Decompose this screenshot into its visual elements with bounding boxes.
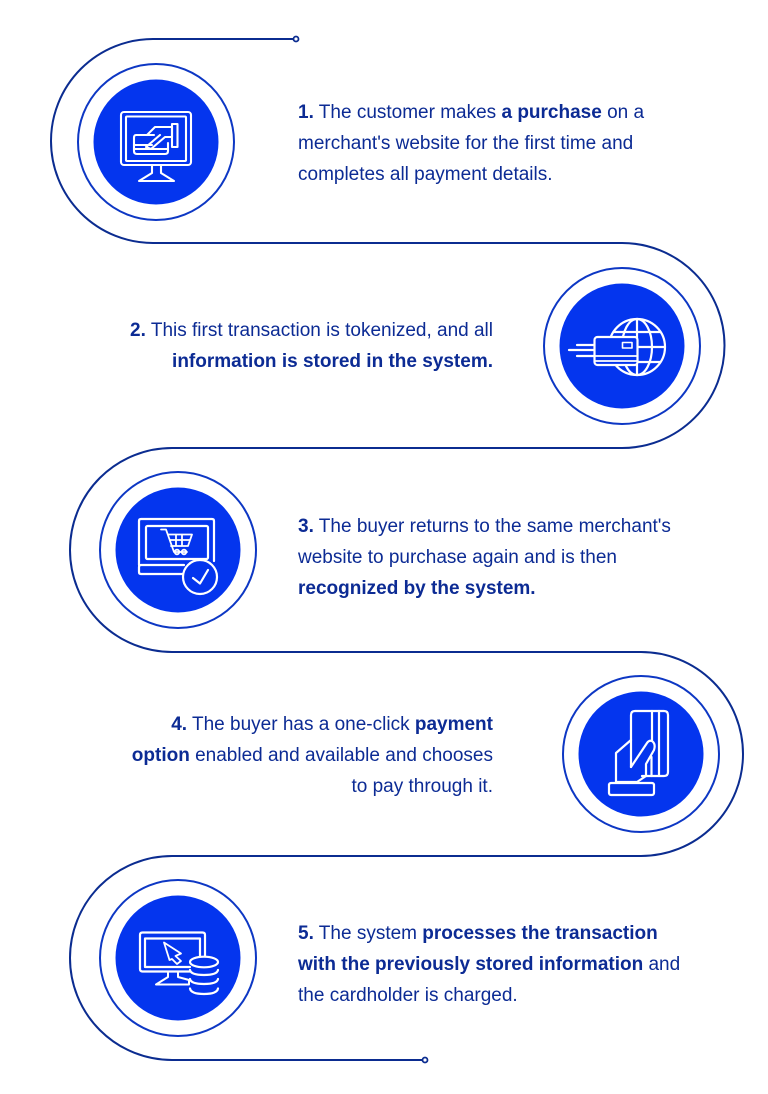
- text: step 4: to pay through it.: [351, 776, 493, 797]
- text: step 1: 1. The customer makes a purchase on a: [298, 102, 644, 123]
- text: step 3: website to purchase again and is then: [298, 547, 617, 568]
- step 2 badge: [544, 268, 700, 424]
- step 3 badge: [100, 472, 256, 628]
- text: step 4: option enabled and available and chooses: [132, 745, 493, 766]
- text: step 2: information is stored in the system.: [172, 351, 493, 372]
- icon: credit card flying past globe: [569, 319, 665, 375]
- text: step 3: recognized by the system.: [298, 578, 536, 599]
- text: step 2: 2. This first transaction is tokenized, and all: [130, 320, 493, 341]
- text: step 5: with the previously stored information and: [298, 954, 680, 975]
- text: step 4: [132, 714, 493, 797]
- step 1 badge: [78, 64, 234, 220]
- step 4 badge: [563, 676, 719, 832]
- text: step 2: [130, 320, 493, 372]
- step 5 badge: [100, 880, 256, 1036]
- icon: monitor with cursor and database: [140, 932, 218, 994]
- text: step 3: [298, 516, 671, 599]
- icon: laptop with cart and check mark: [139, 519, 217, 594]
- text: step 3: 3. The buyer returns to the same merchant's: [298, 516, 671, 537]
- text: step 1: completes all payment details.: [298, 164, 553, 185]
- text: step 1: merchant's website for the first time and: [298, 133, 633, 154]
- icon: hand holding card: [609, 711, 668, 795]
- text: step 4: 4. The buyer has a one-click payment: [171, 714, 493, 735]
- text: step 5: the cardholder is charged.: [298, 985, 518, 1006]
- text: step 1: [298, 102, 644, 185]
- text: step 5: [298, 923, 680, 1006]
- text: step 5: 5. The system processes the transaction: [298, 923, 658, 944]
- icon: monitor with card payment: [121, 112, 191, 181]
